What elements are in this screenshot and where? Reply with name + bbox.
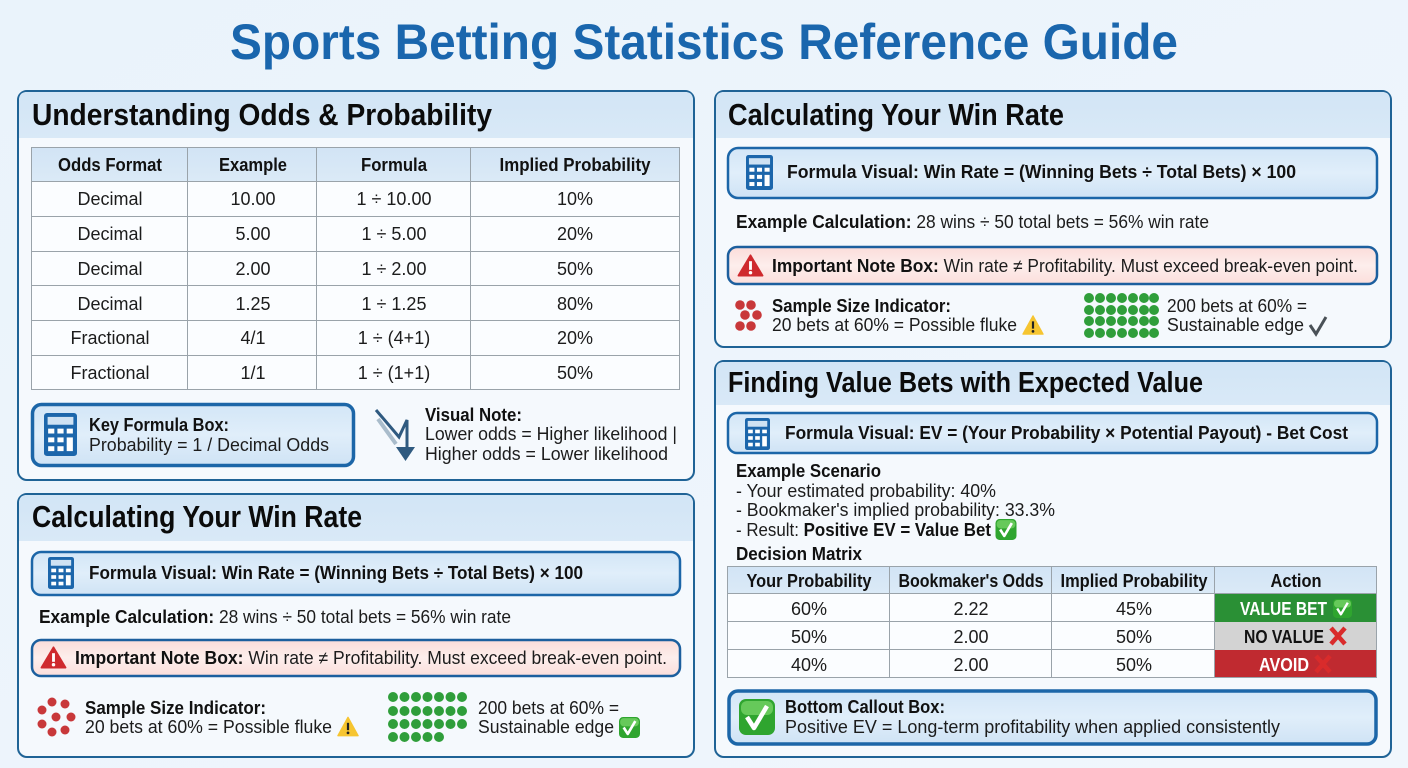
decision matrix table: AVOID: [1259, 655, 1309, 675]
odds table: 20%: [557, 224, 593, 244]
decision matrix table: 2.22: [953, 599, 989, 619]
formula box right: [728, 148, 1377, 198]
bottom callout box: [729, 691, 1376, 744]
title: Sports Betting Statistics Reference Guide: [230, 14, 1178, 70]
sample size text large: Sustainable edge: [478, 717, 614, 737]
odds table: Formula: [361, 155, 428, 175]
odds table: Decimal: [77, 189, 143, 209]
odds table: 1 ÷ 1.25: [362, 294, 426, 314]
heading: value bets: Finding Value Bets with Expected Value: [728, 367, 1203, 399]
bottom callout box: Positive EV = Long-term profitability when applied consistently: [785, 717, 1280, 737]
important note box right: [728, 247, 1377, 284]
odds table: 10.00: [230, 189, 276, 209]
odds table: 20%: [557, 328, 593, 348]
green dots right: [1084, 293, 1159, 338]
example scenario: [736, 461, 1055, 540]
example scenario: - Your estimated probability: 40%: [736, 481, 996, 501]
odds table: 1 ÷ 5.00: [362, 224, 426, 244]
visual note: [425, 405, 677, 464]
formula box: Formula Visual: Win Rate = (Winning Bets ÷ Total Bets) × 100: [89, 563, 583, 583]
sample size text large right: [1167, 296, 1326, 335]
sample size text small: Sample Size Indicator:: [85, 698, 266, 718]
decision matrix table: Action: [1270, 571, 1322, 591]
decision matrix label: Decision Matrix: [736, 544, 862, 564]
formula box: [32, 552, 680, 595]
example scenario: - Bookmaker's implied probability: 33.3%: [736, 500, 1055, 520]
formula box right: Formula Visual: Win Rate = (Winning Bets ÷ Total Bets) × 100: [787, 162, 1296, 182]
decision matrix table: 45%: [1116, 599, 1152, 619]
sample size text small right: [772, 296, 1043, 335]
odds table: Decimal: [77, 224, 143, 244]
decision matrix table: 50%: [1116, 655, 1152, 675]
odds table: 1 ÷ 10.00: [357, 189, 431, 209]
heading: win rate right: Calculating Your Win Rate: [728, 97, 1064, 132]
example scenario: - Result: Positive EV = Value Bet: [736, 520, 991, 540]
odds table: Decimal: [77, 294, 143, 314]
decision matrix table: 2.00: [953, 655, 989, 675]
heading: win rate: Calculating Your Win Rate: [32, 499, 362, 534]
odds table: 1/1: [240, 363, 266, 383]
odds table: 10%: [557, 189, 593, 209]
odds table: 1.25: [235, 294, 271, 314]
example calculation: Example Calculation: 28 wins ÷ 50 total bets = 56% win rate: [39, 607, 511, 627]
visual note: Visual Note:: [425, 405, 522, 425]
odds table: 1 ÷ (1+1): [358, 363, 430, 383]
odds table: 1 ÷ (4+1): [358, 328, 430, 348]
bottom callout box: Bottom Callout Box:: [785, 697, 945, 717]
sample size text large: 200 bets at 60% =: [478, 698, 619, 718]
panel: calculating win rate (left): [18, 494, 694, 757]
icon: downward arrow: [376, 410, 415, 461]
odds table: 4/1: [240, 328, 266, 348]
decision matrix table: 50%: [791, 627, 827, 647]
sample size text large right: 200 bets at 60% =: [1167, 296, 1307, 316]
example scenario: Example Scenario: [736, 461, 881, 481]
sample size text large right: Sustainable edge: [1167, 315, 1304, 335]
key formula box: Probability = 1 / Decimal Odds: [89, 435, 329, 455]
odds table: Implied Probability: [500, 155, 650, 175]
visual note: Lower odds = Higher likelihood |: [425, 424, 677, 444]
decision matrix table: 50%: [1116, 627, 1152, 647]
formula box EV: [728, 413, 1377, 453]
sample size text small right: 20 bets at 60% = Possible fluke: [772, 315, 1017, 335]
formula box EV: Formula Visual: EV = (Your Probability × Potential Payout) - Bet Cost: [785, 423, 1348, 443]
decision matrix table: VALUE BET: [1240, 599, 1327, 619]
decision matrix table: NO VALUE: [1244, 627, 1324, 647]
odds table: 50%: [557, 259, 593, 279]
decision matrix table: 60%: [791, 599, 827, 619]
odds table: Odds Format: [58, 155, 162, 175]
important note box: Important Note Box: Win rate ≠ Profitability. Must exceed break-even point.: [75, 648, 667, 668]
example calculation right: Example Calculation: 28 wins ÷ 50 total bets = 56% win rate: [736, 212, 1209, 232]
decision matrix table: [728, 566, 1377, 678]
sample size: green dots: [388, 692, 467, 742]
decision matrix table: Bookmaker's Odds: [898, 571, 1044, 591]
odds table: 80%: [557, 294, 593, 314]
sample size: red dots: [38, 698, 76, 736]
odds table: Example: [219, 155, 287, 175]
odds table: Fractional: [70, 328, 150, 348]
panel: understanding odds and probability: [18, 91, 694, 480]
odds table: [32, 148, 680, 390]
decision matrix table: Your Probability: [746, 571, 872, 591]
decision matrix table: 40%: [791, 655, 827, 675]
decision matrix table: Implied Probability: [1060, 571, 1208, 591]
odds table: 5.00: [235, 224, 271, 244]
panel: calculating win rate (right): [715, 91, 1391, 347]
important note box: [32, 640, 680, 676]
odds table: Decimal: [77, 259, 143, 279]
red dots right: [735, 300, 762, 331]
sample size text large: [478, 698, 640, 738]
sample size text small: [85, 698, 358, 737]
important note box right: Important Note Box: Win rate ≠ Profitability. Must exceed break-even point.: [772, 256, 1358, 276]
odds table: 2.00: [235, 259, 271, 279]
heading: understanding odds: Understanding Odds & Probability: [32, 97, 493, 132]
sample size text small: 20 bets at 60% = Possible fluke: [85, 717, 332, 737]
visual note: Higher odds = Lower likelihood: [425, 444, 668, 464]
panel: finding value bets: [715, 361, 1391, 757]
decision matrix table: 2.00: [953, 627, 989, 647]
odds table: Fractional: [70, 363, 150, 383]
odds table: 1 ÷ 2.00: [362, 259, 426, 279]
sample size text small right: Sample Size Indicator:: [772, 296, 951, 316]
key formula box: Key Formula Box:: [89, 415, 229, 435]
odds table: 50%: [557, 363, 593, 383]
key formula box: [32, 404, 354, 466]
